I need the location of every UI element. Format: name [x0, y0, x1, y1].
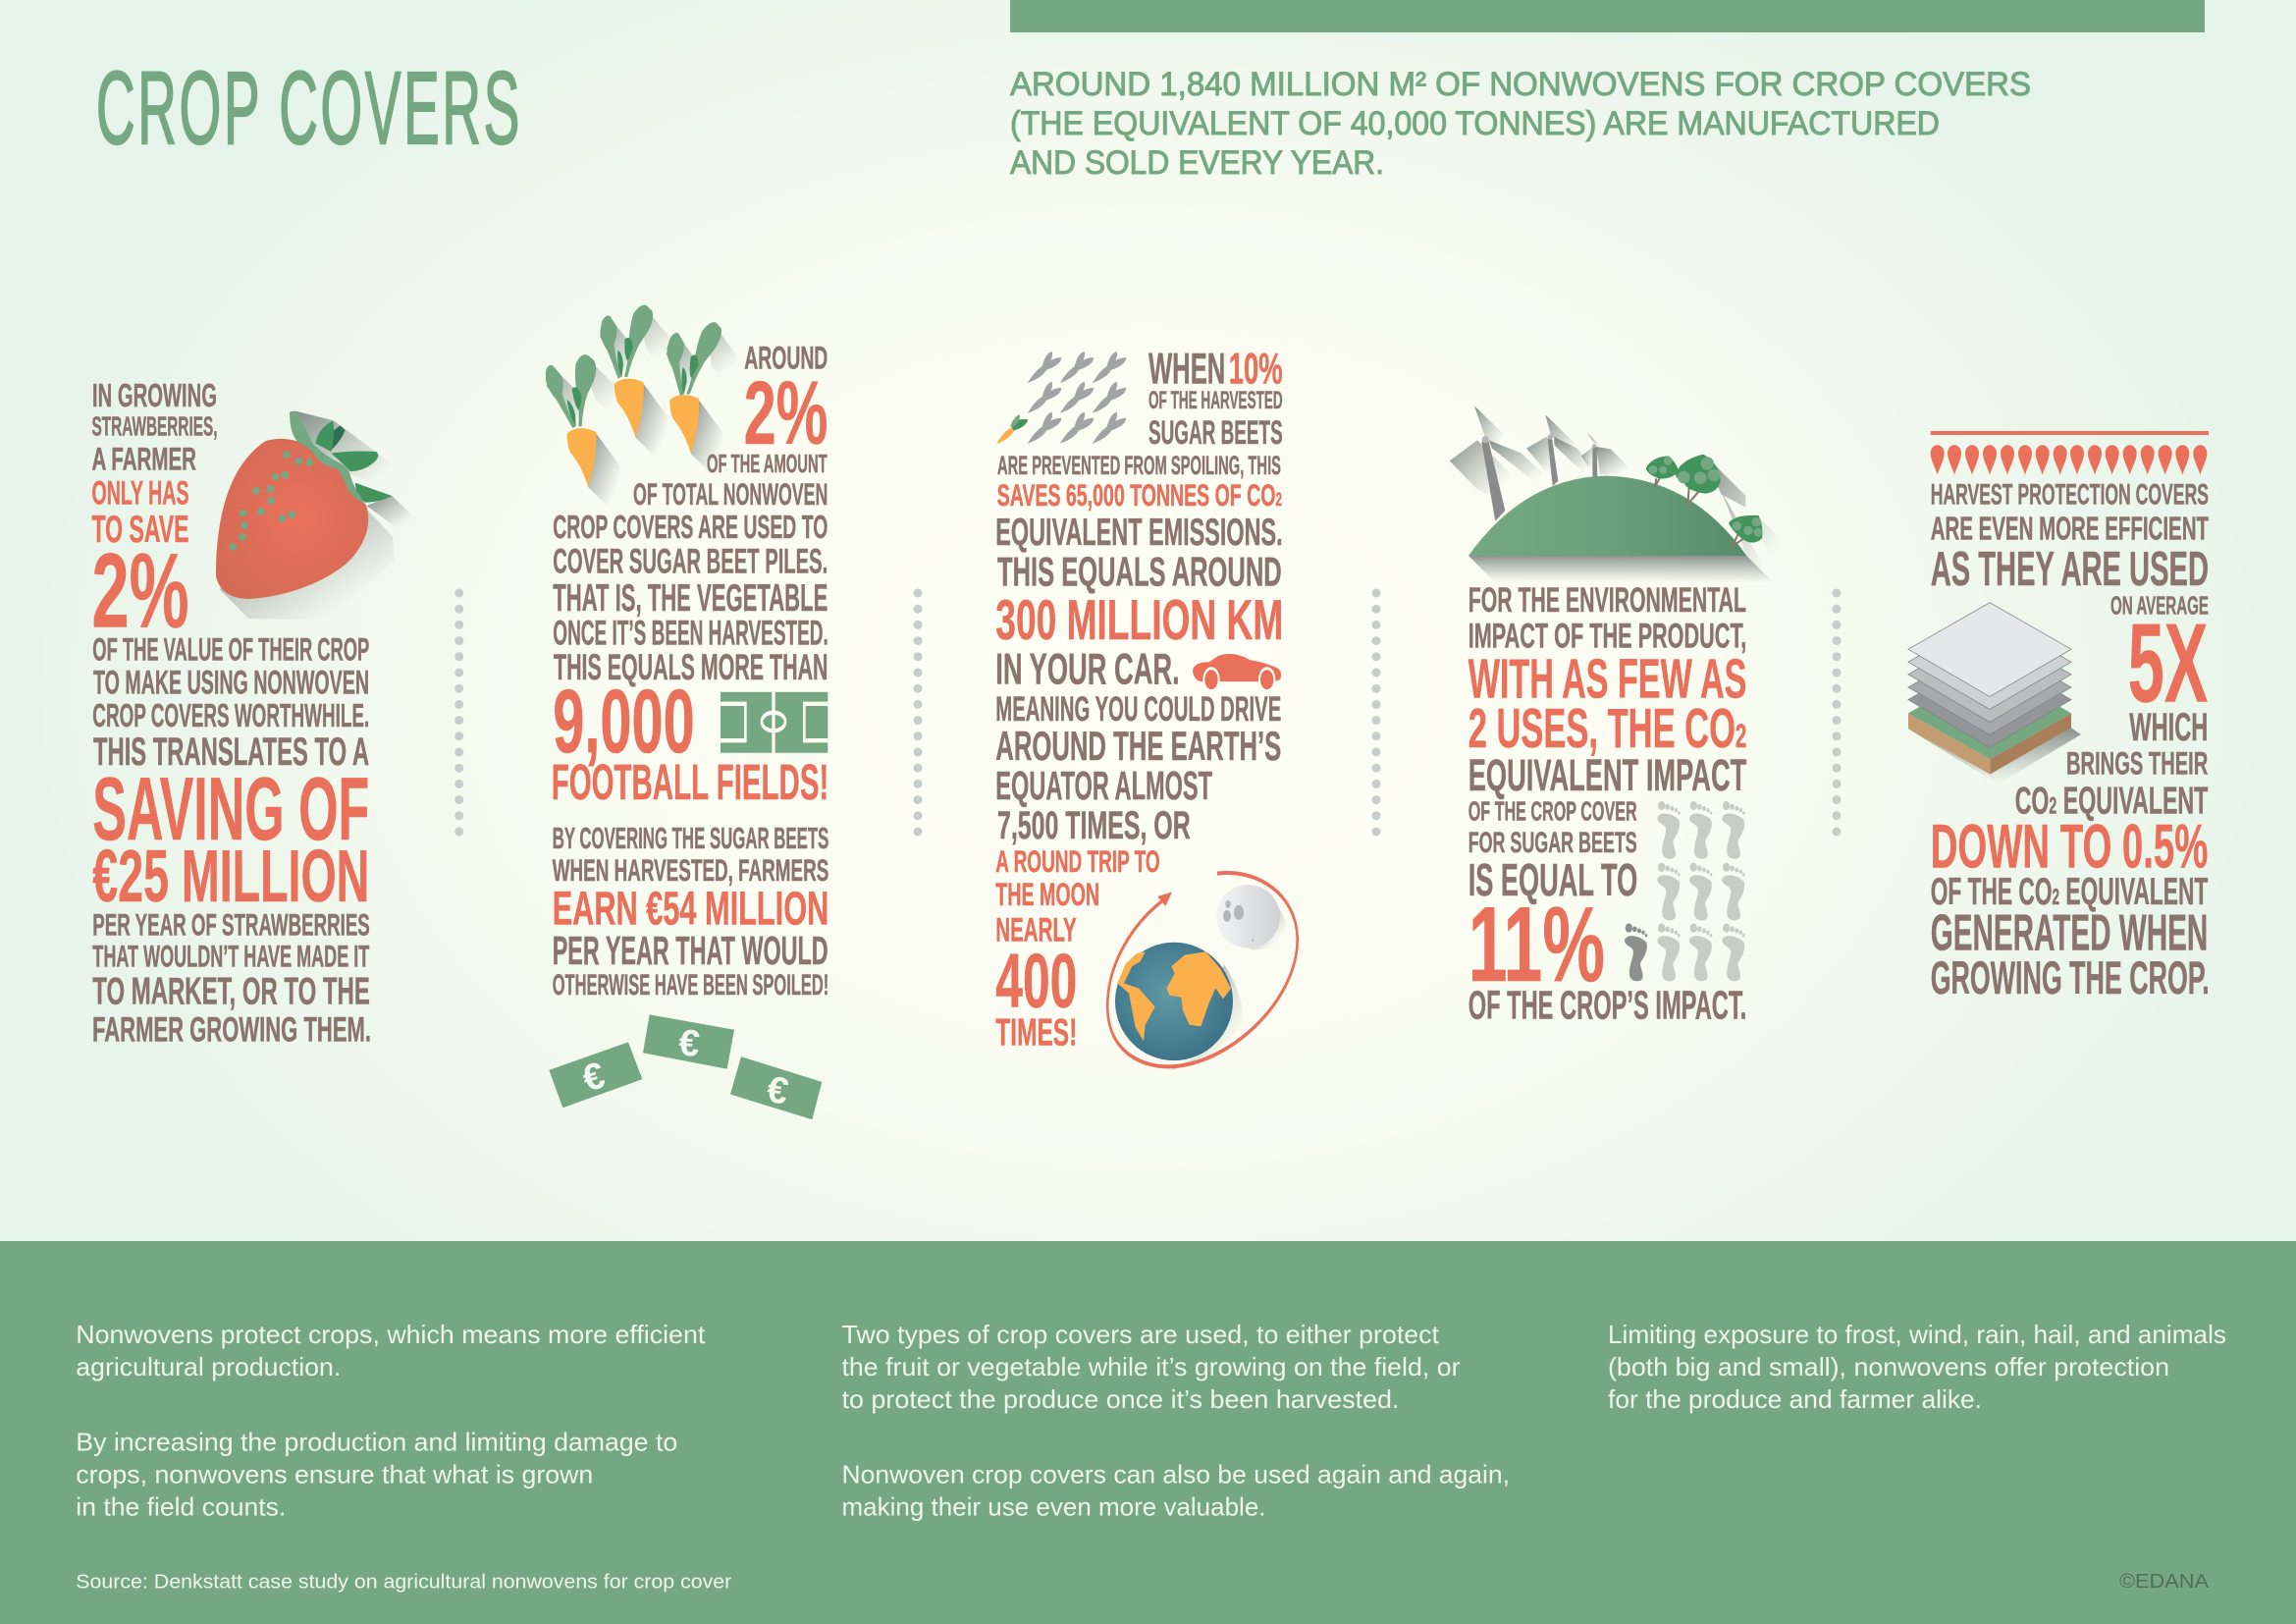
text block: sugar beet piles: OTHERWISE HAVE BEEN SPOILED!	[553, 969, 828, 1001]
divider 2	[913, 589, 923, 837]
text block: harvest protection covers: ON AVERAGE	[2110, 593, 2209, 621]
text block: CO2 savings: AROUND THE EARTH’S	[995, 723, 1281, 769]
text block: environmental impact: FOR SUGAR BEETS	[1468, 827, 1637, 859]
intro text	[1010, 66, 2031, 182]
text block: CO2 savings: A ROUND TRIP TO	[995, 843, 1160, 879]
footer column 2: Two types of crop covers are used, to either protect	[842, 1320, 1440, 1349]
text block: sugar beet piles: AROUND	[744, 340, 828, 376]
text block: strawberry saving: ONLY HAS	[92, 474, 188, 512]
text block: harvest protection covers: WHICH	[2129, 705, 2208, 749]
text block: sugar beet piles: PER YEAR THAT WOULD	[553, 928, 828, 973]
text block: strawberry saving: CROP COVERS WORTHWHILE.	[92, 698, 369, 734]
panel: strawberries	[92, 378, 417, 1049]
text block: CO2 savings: 7,500 TIMES, OR	[997, 804, 1191, 847]
text block: CO2 savings: IN YOUR CAR.	[995, 645, 1180, 694]
intro text: AROUND 1,840 MILLION M² OF NONWOVENS FOR CROP COVERS	[1010, 66, 2031, 103]
intro text: AND SOLD EVERY YEAR.	[1010, 144, 1384, 182]
text block: CO2 savings: SAVES 65,000 TONNES OF CO2	[997, 477, 1282, 513]
text block: sugar beet piles	[552, 340, 828, 1001]
text block: CO2 savings: EQUATOR ALMOST	[995, 763, 1212, 808]
text block: CO2 savings: THE MOON	[995, 877, 1099, 912]
text block: environmental impact: IS EQUAL TO	[1468, 854, 1637, 905]
text block: CO2 savings: 300 MILLION KM	[995, 589, 1283, 652]
footer column 2: Nonwoven crop covers can also be used again and again,	[842, 1460, 1510, 1489]
text block: CO2 savings: THIS EQUALS AROUND	[997, 549, 1282, 595]
text block: sugar beet piles: THAT IS, THE VEGETABLE	[553, 577, 828, 620]
text block: strawberry saving	[92, 378, 371, 1049]
text block: strawberry saving: €25 MILLION	[92, 835, 369, 917]
text block: CO2 savings: WHEN	[1148, 345, 1225, 394]
footer column 2	[842, 1320, 1510, 1521]
text block: strawberry saving: TO MAKE USING NONWOVEN	[93, 665, 369, 702]
text block: sugar beet piles: CROP COVERS ARE USED TO	[553, 510, 828, 546]
intro text: (THE EQUIVALENT OF 40,000 TONNES) ARE MANUFACTURED	[1010, 105, 1940, 142]
text block: sugar beet piles: WHEN HARVESTED, FARMERS	[553, 852, 828, 888]
panel: harvest protection covers	[1908, 431, 2210, 1003]
text block: sugar beet piles: 9,000	[553, 672, 695, 772]
icon: strawberry	[216, 410, 417, 621]
text block: environmental impact	[1468, 581, 1746, 1028]
text block: sugar beet piles: THIS EQUALS MORE THAN	[554, 646, 828, 687]
footer column 2: the fruit or vegetable while it’s growing on the field, or	[842, 1352, 1461, 1381]
text block: CO2 savings	[995, 345, 1283, 1055]
text block: strawberry saving: IN GROWING	[92, 378, 217, 414]
text block: sugar beet piles: OF THE AMOUNT	[707, 451, 828, 478]
footer column 1: Nonwovens protect crops, which means more efficient	[76, 1320, 706, 1349]
footer column 3	[1608, 1320, 2226, 1414]
panel: sugar beet piles	[546, 305, 828, 1119]
text block: environmental impact: FOR THE ENVIRONMENTAL	[1468, 581, 1746, 620]
divider 1	[454, 589, 463, 837]
icon: banknotes: €	[578, 1055, 610, 1100]
text block: CO2 savings: 400	[995, 937, 1077, 1023]
footer column 3: for the produce and farmer alike.	[1608, 1384, 1982, 1414]
source note: Source: Denkstatt case study on agricultural nonwovens for crop cover	[76, 1571, 731, 1593]
text block: sugar beet piles: COVER SUGAR BEET PILES.	[553, 543, 828, 581]
icon: banknotes: €	[677, 1022, 701, 1065]
copyright: ©EDANA	[2119, 1570, 2209, 1593]
text block: CO2 savings: EQUIVALENT EMISSIONS.	[995, 512, 1283, 554]
text block: strawberry saving: TO SAVE	[92, 509, 188, 551]
text block: strawberry saving: TO MARKET, OR TO THE	[92, 971, 370, 1013]
text block: strawberry saving: SAVING OF	[92, 760, 369, 859]
text block: strawberry saving: FARMER GROWING THEM.	[92, 1009, 371, 1049]
icon: coral rule with teardrops	[1931, 431, 2209, 475]
text block: environmental impact: OF THE CROP COVER	[1468, 796, 1637, 827]
text block: strawberry saving: PER YEAR OF STRAWBERRIES	[92, 907, 370, 942]
footer column 1: By increasing the production and limiting damage to	[76, 1428, 677, 1457]
icon: banknotes	[549, 1014, 822, 1119]
text block: CO2 savings: MEANING YOU COULD DRIVE	[995, 689, 1281, 729]
text block: harvest protection covers	[1931, 479, 2210, 1003]
footer column 1: crops, nonwovens ensure that what is grown	[76, 1460, 593, 1489]
icon: three sugar beets	[546, 305, 749, 513]
text block: sugar beet piles: ONCE IT’S BEEN HARVESTED.	[553, 615, 828, 652]
icon: grid of sugar beets	[996, 352, 1126, 444]
text block: strawberry saving: THAT WOULDN’T HAVE MADE IT	[92, 939, 369, 974]
text block: environmental impact: OF THE CROP’S IMPACT.	[1468, 983, 1746, 1028]
text block: CO2 savings: NEARLY	[995, 911, 1077, 948]
icon: football field	[721, 692, 828, 753]
text block: CO2 savings: OF THE HARVESTED	[1148, 387, 1283, 414]
text block: CO2 savings: ARE PREVENTED FROM SPOILING, THIS	[997, 451, 1281, 480]
text block: CO2 savings: TIMES!	[995, 1012, 1077, 1055]
footer column 3: Limiting exposure to frost, wind, rain, hail, and animals	[1608, 1320, 2226, 1349]
text block: strawberry saving: A FARMER	[92, 442, 196, 477]
text block: sugar beet piles: EARN €54 MILLION	[553, 884, 828, 936]
title: CROP COVERS	[96, 51, 522, 166]
text block: strawberry saving: 2%	[92, 531, 188, 650]
panel: environmental impact	[1450, 406, 1789, 1028]
footer column 2: making their use even more valuable.	[842, 1491, 1266, 1521]
icon: stacked cover layers	[1908, 603, 2081, 784]
text block: harvest protection covers: BRINGS THEIR	[2066, 744, 2208, 782]
icon: banknotes: €	[764, 1069, 791, 1113]
text block: harvest protection covers: 5X	[2128, 602, 2208, 727]
text block: CO2 savings: SUGAR BEETS	[1148, 414, 1283, 452]
icon: hill with wind turbines and trees	[1450, 406, 1789, 582]
text block: environmental impact: WITH AS FEW AS	[1468, 648, 1746, 711]
text block: sugar beet piles: 2%	[744, 363, 828, 463]
divider 3	[1372, 589, 1380, 837]
text block: environmental impact: IMPACT OF THE PRODUCT,	[1468, 616, 1746, 655]
footer column 1	[76, 1320, 706, 1521]
divider 4	[1832, 589, 1842, 837]
text block: sugar beet piles: BY COVERING THE SUGAR BEETS	[553, 823, 828, 855]
text block: strawberry saving: OF THE VALUE OF THEIR CROP	[92, 631, 369, 667]
icon: footprints	[1625, 801, 1745, 981]
text block: strawberry saving: THIS TRANSLATES TO A	[93, 731, 369, 774]
footer column 2: to protect the produce once it’s been harvested.	[842, 1384, 1400, 1414]
text block: environmental impact: 11%	[1468, 885, 1605, 1004]
icon: earth and moon with orbit	[1107, 873, 1298, 1071]
footer column 1: in the field counts.	[76, 1491, 286, 1521]
footer column 3: (both big and small), nonwovens offer protection	[1608, 1352, 2169, 1381]
footer column 1: agricultural production.	[76, 1352, 341, 1381]
icon: car	[1193, 654, 1281, 691]
text block: environmental impact: EQUIVALENT IMPACT	[1468, 750, 1746, 800]
panel: CO2 savings and car, earth, moon	[995, 345, 1298, 1071]
text block: strawberry saving: STRAWBERRIES,	[92, 411, 218, 442]
text block: sugar beet piles: FOOTBALL FIELDS!	[552, 754, 828, 810]
text block: CO2 savings: 10%	[1229, 345, 1283, 394]
text block: sugar beet piles: OF TOTAL NONWOVEN	[633, 476, 828, 512]
top bar	[1010, 0, 2205, 32]
footer band	[0, 1241, 2296, 1624]
text block: environmental impact: 2 USES, THE CO2	[1468, 697, 1746, 760]
